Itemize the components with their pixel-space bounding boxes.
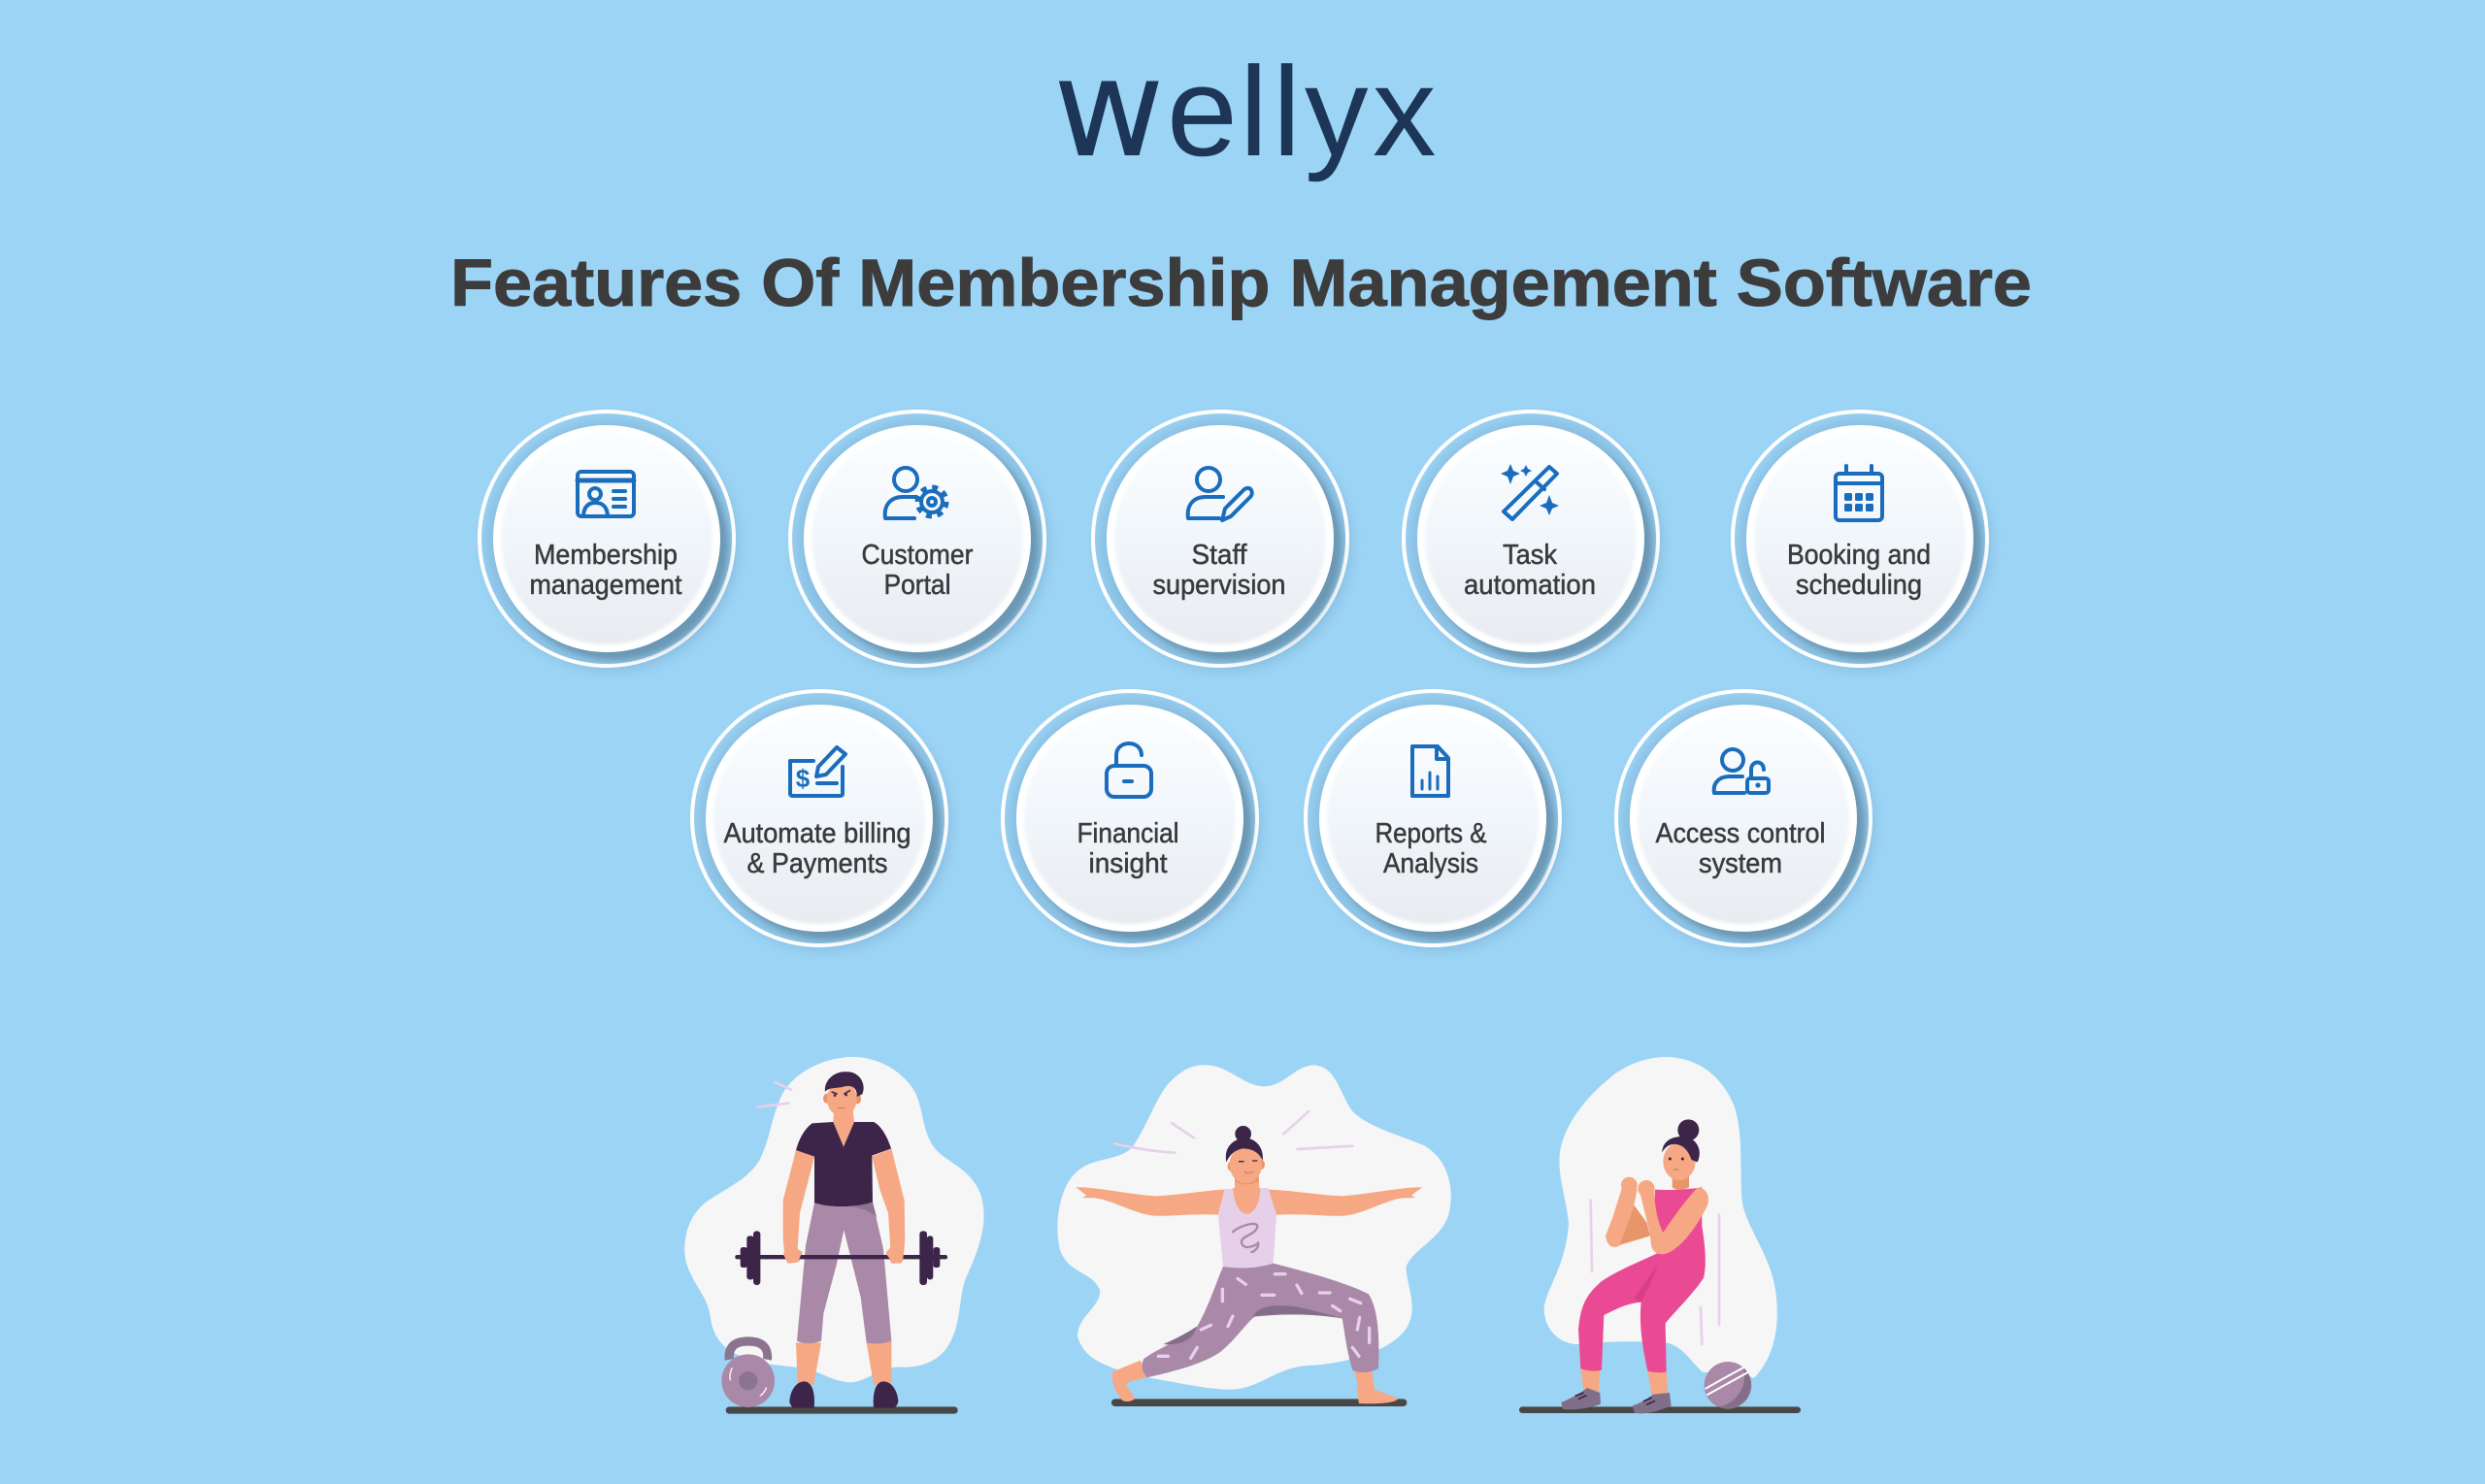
barbell	[735, 1231, 947, 1285]
motion lines	[1114, 1111, 1352, 1153]
icon: membership id card	[578, 472, 634, 516]
illustration: woman squatting	[1519, 1057, 1801, 1413]
feature card: Task automation	[1404, 412, 1663, 672]
label: Membership management: Membership	[534, 540, 678, 571]
label: Task automation: automation	[1464, 570, 1596, 601]
motion lines	[1591, 1201, 1719, 1344]
background blob	[1544, 1057, 1777, 1378]
label: Access control system: system	[1699, 848, 1782, 879]
label: Booking and scheduling	[1787, 540, 1931, 601]
label: Financial insight	[1077, 818, 1178, 879]
background blob	[1057, 1065, 1451, 1390]
icon: person with lock	[1714, 749, 1769, 793]
feature card: Customer Portal	[790, 412, 1049, 672]
label: Customer Portal	[862, 540, 974, 601]
label: Booking and scheduling: Booking and	[1787, 540, 1931, 571]
label: Booking and scheduling: scheduling	[1796, 570, 1922, 601]
label: Financial insight: Financial	[1077, 818, 1178, 849]
label: Membership management	[530, 540, 681, 601]
label: Access control system	[1656, 818, 1825, 879]
label: Staff supervision: supervision	[1153, 570, 1285, 601]
icon: person with pen	[1188, 468, 1252, 520]
icon: open padlock	[1107, 743, 1151, 797]
icon: magic wand	[1501, 464, 1559, 519]
feature card: Membership management	[480, 412, 739, 672]
feature card: Access control system	[1616, 691, 1875, 951]
icon: cheque with pen	[790, 747, 845, 796]
feature card: Financial insight	[1003, 691, 1262, 951]
icon: calendar	[1836, 466, 1882, 520]
medicine ball	[1705, 1362, 1751, 1409]
label: Staff supervision	[1153, 540, 1285, 601]
logo: wellyx: wellyx	[1053, 30, 1437, 188]
label: Customer Portal: Customer	[862, 540, 974, 571]
icon: cheque with pen: $	[796, 764, 811, 793]
label: Financial insight: insight	[1089, 848, 1167, 879]
label: Automate billing & Payments: & Payments	[747, 848, 887, 879]
label: Task automation: Task	[1503, 540, 1557, 571]
title: Features Of Membership Management Software	[450, 246, 2032, 320]
label: Customer Portal: Portal	[883, 570, 951, 601]
feature card: Booking and scheduling	[1733, 412, 1992, 672]
figure	[783, 1072, 905, 1408]
label: Membership management: management	[530, 570, 681, 601]
label: Reports & Analysis: Analysis	[1383, 848, 1478, 879]
feature card: Automate billing & Payments	[692, 691, 951, 951]
ground	[1519, 1406, 1801, 1413]
label: Automate billing & Payments	[724, 818, 911, 879]
label: Task automation	[1464, 540, 1596, 601]
kettlebell	[721, 1336, 775, 1407]
background blob	[684, 1057, 984, 1382]
figure	[1076, 1126, 1422, 1403]
label: Reports & Analysis	[1375, 818, 1487, 879]
label: Automate billing & Payments: Automate billing	[724, 818, 911, 849]
label: Access control system: Access control	[1656, 818, 1825, 849]
ground	[726, 1406, 958, 1414]
label: Reports & Analysis: Reports &	[1375, 818, 1487, 849]
illustration: woman in warrior yoga pose	[1057, 1065, 1451, 1406]
feature card: Staff supervision	[1093, 412, 1352, 672]
feature card: Reports & Analysis	[1306, 691, 1565, 951]
icon: person with gear	[885, 468, 946, 518]
label: Staff supervision: Staff	[1192, 540, 1247, 571]
ground	[1111, 1399, 1407, 1406]
icon: report document	[1412, 746, 1448, 796]
motion lines	[757, 1082, 791, 1107]
illustration: man lifting barbell	[684, 1057, 984, 1414]
figure	[1561, 1119, 1708, 1413]
